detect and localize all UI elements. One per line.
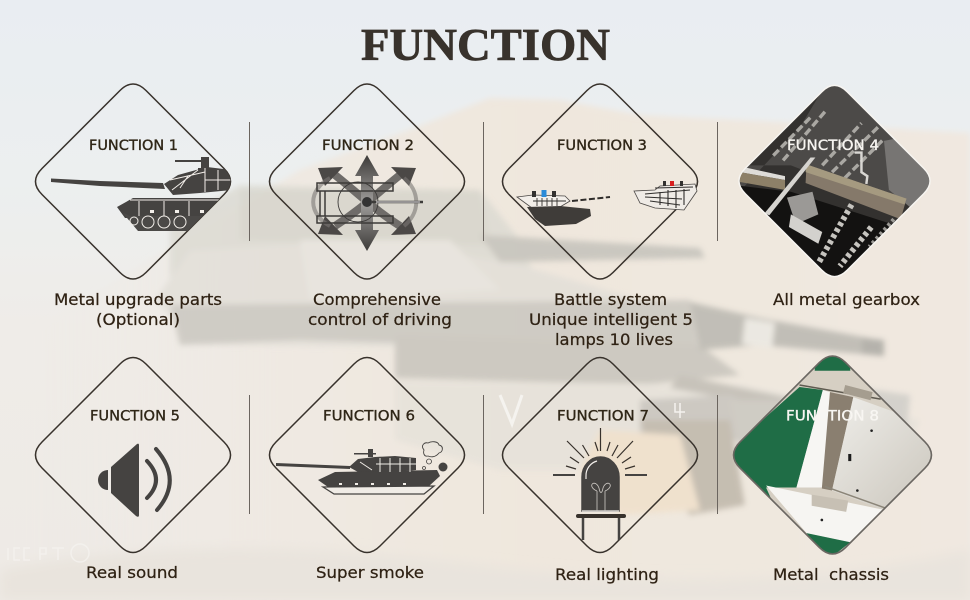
label: function 1: FUNCTION 1 [89,138,178,154]
icon: light bulb [553,428,647,540]
photo: metal gearbox [740,86,930,276]
caption 1: Metal upgrade parts [54,290,222,309]
caption 2: control of driving [308,310,452,329]
icon: tank side view [51,157,232,232]
label: function 4: FUNCTION 4 [787,138,879,154]
icon: two battling tanks [517,181,697,226]
caption 3: Battle system [554,290,667,309]
divider lines [250,122,718,514]
caption 1 [54,290,222,329]
photo rim 8 [734,356,931,554]
diamond frame 2 [270,84,464,279]
caption 3: Unique intelligent 5 [529,310,693,329]
caption 2 [308,290,452,329]
label: function 5: FUNCTION 5 [90,408,180,424]
label: function 8: FUNCTION 8 [786,408,879,424]
panel: function 3 [502,84,698,349]
label: function 3: FUNCTION 3 [557,138,647,154]
caption 1: (Optional) [96,310,180,329]
label: function 6: FUNCTION 6 [323,408,415,424]
caption 6: Super smoke [316,563,424,582]
caption 4: All metal gearbox [773,290,920,309]
caption 5: Real sound [86,563,178,582]
diamond frame 5 [36,358,230,552]
caption 3 [529,290,693,349]
icon: speaker [98,444,170,517]
diamond frame 6 [270,358,464,552]
caption 8: Metal chassis [773,565,889,584]
label: function 7: FUNCTION 7 [557,408,649,424]
panel: function 8 [732,355,932,580]
title: FUNCTION [361,20,610,70]
panel: function 1 [36,84,232,329]
panel: function 7 [502,358,698,584]
panel: function 2 [270,84,464,329]
photo rim 4 [739,85,930,277]
panel: function 5 [36,358,230,582]
caption 3: lamps 10 lives [555,330,673,349]
caption 2: Comprehensive [313,290,441,309]
label: function 2: FUNCTION 2 [322,138,414,154]
diamond frame 1 [36,84,230,279]
panel: function 6 [270,358,464,582]
diamond frame 7 [502,358,698,552]
panel: function 4 [732,77,938,309]
icon: tank with smoke [276,442,448,494]
icon: drive directions arrows and tank top view [313,155,423,251]
diamond frame 3 [502,84,698,279]
caption 7: Real lighting [555,565,659,584]
photo: metal chassis [734,356,930,554]
